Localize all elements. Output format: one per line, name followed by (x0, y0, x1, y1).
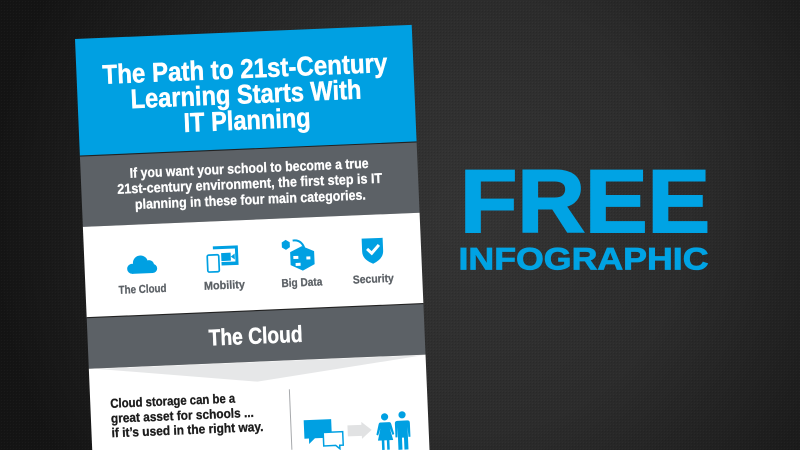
title: The Path to 21st-Century (102, 48, 388, 90)
heading: The Cloud: The Cloud (208, 321, 303, 351)
poster: tilted infographic preview (75, 25, 430, 450)
body text (110, 389, 264, 440)
chevron pointer (97, 355, 424, 388)
icon: cloud (127, 255, 157, 274)
panel: grey section heading band (87, 303, 426, 369)
panel: cloud section body (89, 355, 430, 450)
body text: great asset for schools ... (111, 405, 254, 426)
introduction text: 21st-century environment, the first step is IT (117, 170, 383, 197)
introduction text: If you want your school to become a true (129, 155, 369, 181)
headline: INFOGRAPHIC: INFOGRAPHIC (458, 240, 708, 276)
panel: grey introduction band (80, 141, 420, 227)
icon: security shield (362, 238, 384, 264)
icon: mobility devices (207, 245, 239, 272)
headline: FREE: FREE (460, 151, 710, 251)
title: Learning Starts With (130, 75, 362, 114)
panel: blue title band (75, 25, 417, 156)
icon: speech bubbles (304, 419, 343, 450)
panel: four categories (83, 213, 423, 318)
column divider (289, 389, 292, 450)
label: Mobility: Mobility (204, 279, 246, 293)
label: Security: Security (353, 273, 395, 287)
title (102, 48, 390, 141)
icon: big data cube (282, 239, 315, 271)
arrow (347, 421, 372, 439)
body text: if it’s used in the right way. (111, 419, 264, 440)
title: IT Planning (183, 103, 311, 138)
label: Big Data: Big Data (281, 276, 323, 290)
label: The Cloud: The Cloud (118, 283, 167, 297)
body text: Cloud storage can be a (110, 391, 236, 411)
introduction text (116, 154, 383, 213)
icon: male figure (394, 411, 411, 450)
icon: female figure (376, 413, 395, 450)
introduction text: planning in these four main categories. (135, 186, 366, 212)
